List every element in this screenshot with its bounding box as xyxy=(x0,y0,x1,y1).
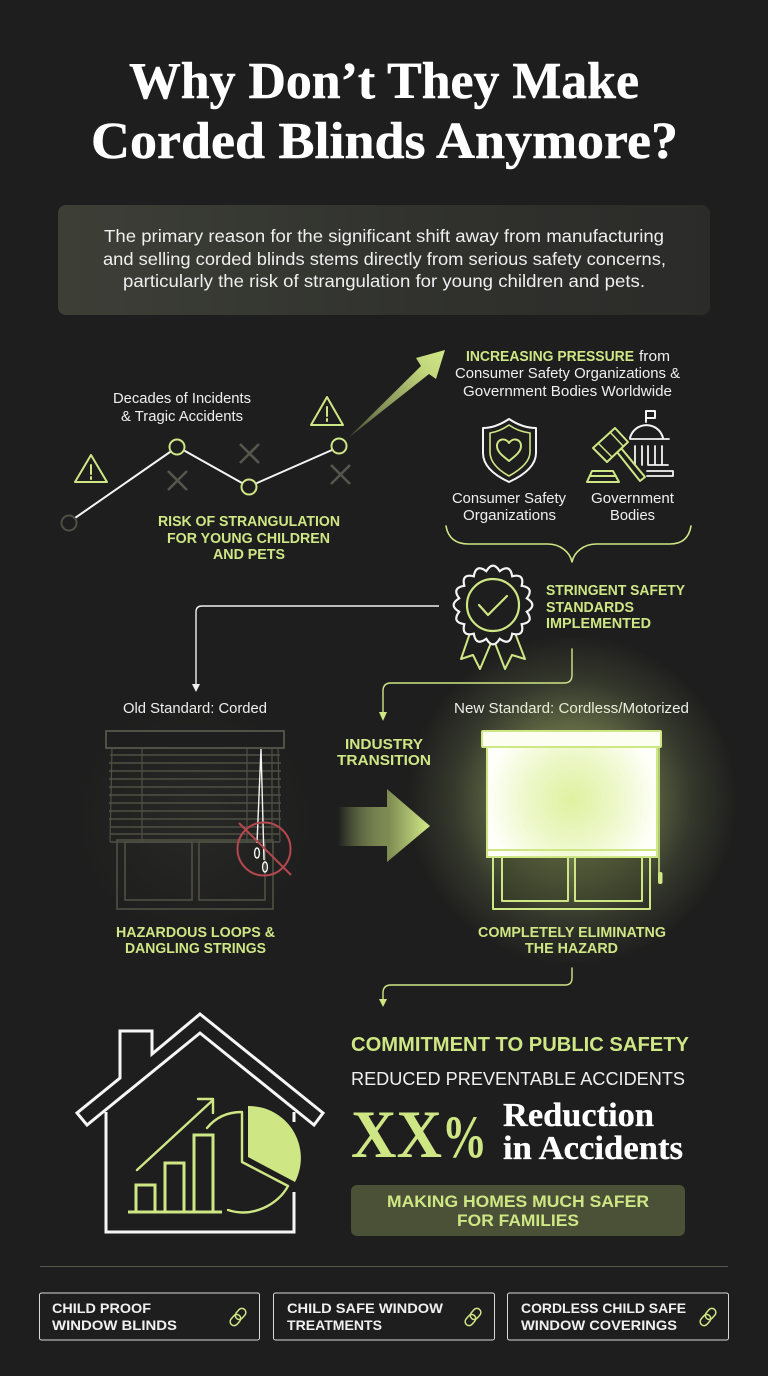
statistic: XX percent reduction: Reduction xyxy=(503,1097,654,1134)
text: government bodies xyxy=(591,491,674,524)
statistic: XX percent reduction xyxy=(351,1096,683,1172)
text: new standard heading: New Standard: Cordless/Motorized xyxy=(454,701,689,717)
text: consumer safety organizations: Organizations xyxy=(463,508,556,524)
tag: child safe window treatments: TREATMENTS xyxy=(287,1317,382,1333)
title: Corded Blinds Anymore? xyxy=(91,113,678,170)
text: increasing pressure: Government Bodies Worldwide xyxy=(463,384,672,400)
text: increasing pressure: from xyxy=(639,349,670,365)
title: Why Don’t They Make xyxy=(129,53,639,110)
tag: child proof window blinds: WINDOW BLINDS xyxy=(52,1317,177,1333)
callout: making homes safer: MAKING HOMES MUCH SAFER xyxy=(387,1192,649,1211)
tag: cordless child safe window coverings: WINDOW COVERINGS xyxy=(521,1317,677,1333)
text: hazardous loops: DANGLING STRINGS xyxy=(125,941,266,957)
text: completely eliminating the hazard: THE HAZARD xyxy=(525,941,618,957)
text: increasing pressure: INCREASING PRESSURE xyxy=(466,349,634,365)
tag: child proof window blinds xyxy=(40,1293,260,1340)
intro panel xyxy=(58,205,710,315)
text: reduced preventable accidents: REDUCED PREVENTABLE ACCIDENTS xyxy=(351,1069,685,1089)
text: increasing pressure xyxy=(455,349,680,400)
text: completely eliminating the hazard: COMPLETELY ELIMINATNG xyxy=(478,925,666,941)
text: government bodies: Bodies xyxy=(610,508,655,524)
title xyxy=(91,53,678,170)
tag: child proof window blinds: CHILD PROOF xyxy=(52,1300,151,1316)
text: hazardous loops xyxy=(116,925,276,957)
icon: certification badge xyxy=(454,566,532,669)
intro panel: The primary reason for the significant shift away from manufacturing xyxy=(104,226,664,246)
intro panel: particularly the risk of strangulation for young children and pets. xyxy=(123,271,645,291)
text: industry transition: TRANSITION xyxy=(337,753,431,769)
statistic: XX percent reduction: in Accidents xyxy=(503,1130,683,1167)
brace xyxy=(446,526,691,562)
text: consumer safety organizations xyxy=(452,491,567,524)
icon: shield with heart xyxy=(483,419,536,482)
text: consumer safety organizations: Consumer Safety xyxy=(452,491,567,507)
arrow: to public safety xyxy=(379,968,572,1007)
text: risk of strangulation: FOR YOUNG CHILDREN xyxy=(167,531,330,547)
text: stringent safety standards xyxy=(546,583,685,632)
statistic: XX percent reduction: % xyxy=(442,1104,487,1170)
text: government bodies: Government xyxy=(591,491,674,507)
arrow: rising pressure xyxy=(347,350,445,439)
text: risk of strangulation: RISK OF STRANGULATION xyxy=(158,514,340,530)
text: industry transition: INDUSTRY xyxy=(345,737,423,753)
text: stringent safety standards: IMPLEMENTED xyxy=(546,616,651,632)
text: industry transition xyxy=(337,737,431,769)
illustration: corded blinds xyxy=(75,700,315,940)
statistic: XX percent reduction: XX xyxy=(351,1096,442,1172)
callout: making homes safer xyxy=(351,1185,685,1236)
illustration: cordless roller shade xyxy=(407,635,737,965)
text: old standard heading: Old Standard: Corded xyxy=(123,701,267,717)
text: risk of strangulation xyxy=(158,514,340,563)
tag: cordless child safe window coverings xyxy=(508,1293,728,1340)
icon: gavel and government building xyxy=(587,411,673,482)
text: increasing pressure: Consumer Safety Organizations & xyxy=(455,366,680,382)
tag: cordless child safe window coverings: CORDLESS CHILD SAFE xyxy=(521,1300,686,1316)
heading: commitment to public safety: COMMITMENT TO PUBLIC SAFETY xyxy=(351,1034,690,1056)
text: decades of incidents: & Tragic Accidents xyxy=(121,409,243,425)
arrow: to old standard xyxy=(192,606,439,692)
tag: child safe window treatments: CHILD SAFE WINDOW xyxy=(287,1300,444,1316)
line chart: decades of incidents xyxy=(62,397,350,530)
icon: house with charts xyxy=(77,1014,323,1232)
arrow: to industry transition xyxy=(379,649,572,721)
text: stringent safety standards: STANDARDS xyxy=(546,600,634,616)
text: decades of incidents: Decades of Incidents xyxy=(113,391,251,407)
text: hazardous loops: HAZARDOUS LOOPS & xyxy=(116,925,276,941)
text: completely eliminating the hazard xyxy=(478,925,666,957)
arrow: industry transition xyxy=(338,789,430,862)
tag: child safe window treatments xyxy=(274,1293,494,1340)
text: decades of incidents xyxy=(113,391,251,425)
callout: making homes safer: FOR FAMILIES xyxy=(457,1211,579,1230)
text: risk of strangulation: AND PETS xyxy=(213,547,285,563)
intro panel: and selling corded blinds stems directly from serious safety concerns, xyxy=(103,249,666,269)
text: stringent safety standards: STRINGENT SAFETY xyxy=(546,583,685,599)
